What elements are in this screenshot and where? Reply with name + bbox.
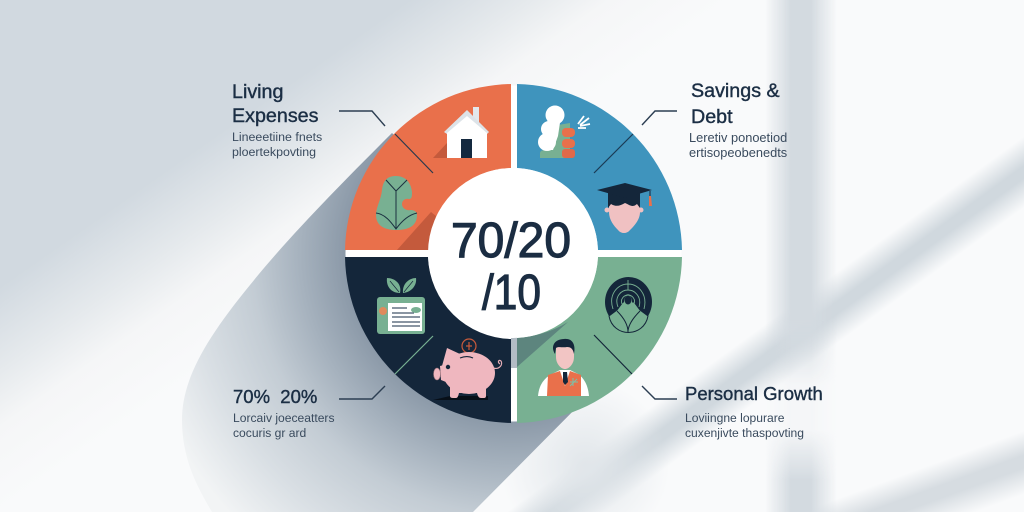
description: Loviingne lopurare bbox=[685, 411, 785, 425]
description: ploertekpovting bbox=[232, 144, 316, 158]
segment: green personal growth bbox=[511, 257, 682, 423]
vertical light band bbox=[770, 0, 832, 512]
segment: dark bbox=[345, 257, 511, 423]
icon: house bbox=[433, 107, 489, 158]
heading: Savings & bbox=[691, 80, 780, 102]
description bbox=[232, 130, 322, 158]
icon: card with leaves bbox=[377, 278, 425, 334]
shadow cast by the donut bbox=[182, 133, 592, 512]
heading: Personal Growth bbox=[685, 383, 823, 404]
connector lines bbox=[339, 111, 677, 399]
icon: radar head bbox=[605, 277, 652, 332]
heading bbox=[232, 81, 318, 127]
heading bbox=[691, 80, 780, 128]
divider lines bbox=[395, 134, 633, 374]
description bbox=[689, 130, 787, 160]
label: personal growth bbox=[685, 383, 823, 440]
description: Lineeetiine fnets bbox=[232, 130, 322, 144]
description: ertisopeobenedts bbox=[689, 144, 787, 160]
description bbox=[685, 411, 804, 440]
icon: leaf bbox=[376, 176, 417, 230]
label: savings and debt bbox=[689, 80, 787, 160]
icon: person in vest bbox=[538, 339, 589, 396]
center label: /10 bbox=[482, 266, 541, 320]
description: cocuris gr ard bbox=[233, 426, 306, 440]
heading: Debt bbox=[691, 106, 733, 128]
white disc behind segments bbox=[346, 86, 682, 422]
segment: blue savings bbox=[517, 84, 682, 250]
label: percentages bbox=[233, 386, 335, 440]
icon: graduate bbox=[597, 183, 652, 233]
description: Lorcaiv joeceatters bbox=[233, 411, 335, 425]
inner shadow on orange bbox=[397, 212, 436, 250]
icon: piggy bank bbox=[433, 339, 502, 400]
icon: stones and plant bbox=[538, 106, 590, 158]
inner shadow on green bbox=[517, 322, 568, 367]
description: cuxenjivte thaspovting bbox=[685, 426, 804, 440]
segment: orange living expenses bbox=[345, 84, 511, 250]
description: Leretiv ponoetiod bbox=[689, 130, 787, 145]
center label bbox=[451, 214, 571, 320]
description bbox=[233, 411, 335, 440]
heading: 70% 20% bbox=[233, 386, 317, 407]
heading: Living bbox=[232, 81, 283, 103]
shaded gap bbox=[511, 336, 517, 368]
center label: 70/20 bbox=[451, 214, 571, 268]
heading: Expenses bbox=[232, 105, 318, 127]
center circle bbox=[428, 168, 598, 338]
label: living expenses bbox=[232, 81, 322, 158]
